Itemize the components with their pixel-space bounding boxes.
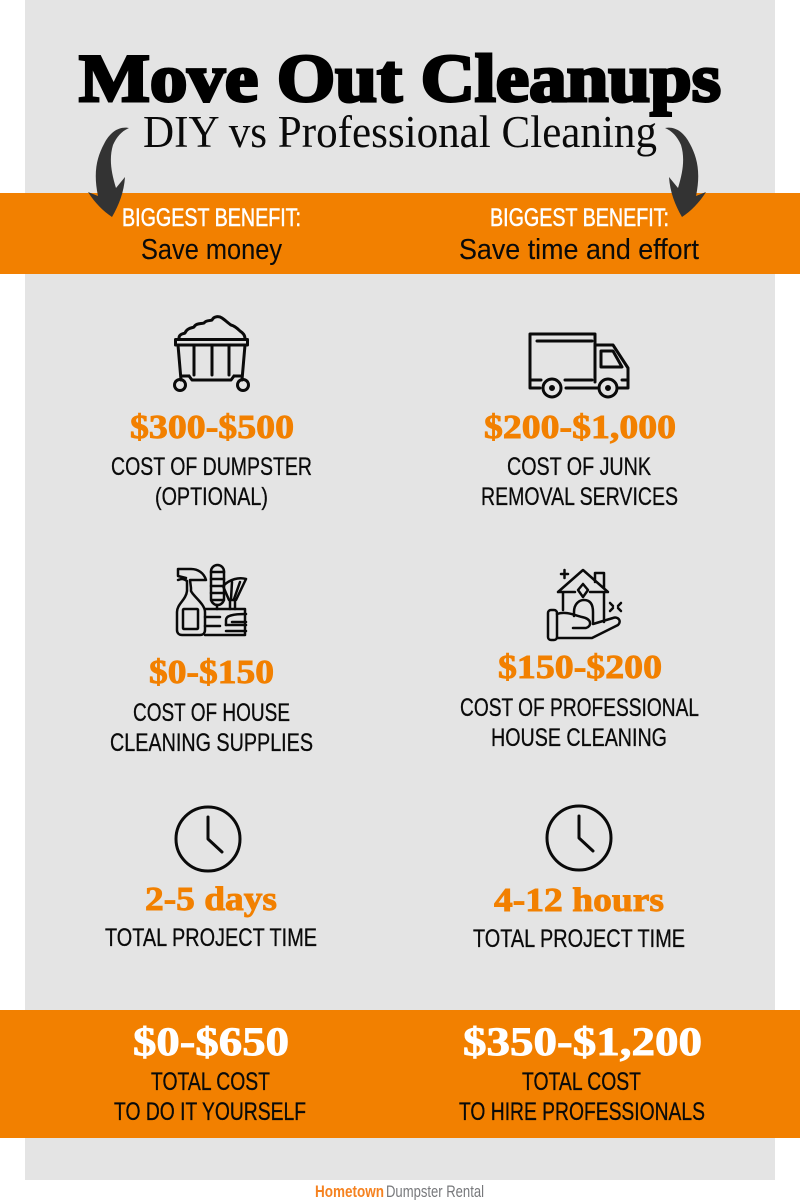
- right benefit: [459, 204, 699, 266]
- dumpster label line 2: (OPTIONAL): [155, 483, 268, 511]
- dumpster price: $300-$500: [130, 409, 294, 446]
- left total cost: [114, 1019, 306, 1126]
- DIY time label: TOTAL PROJECT TIME: [105, 924, 317, 952]
- left benefit text: Save money: [141, 234, 282, 266]
- arrow: left: [88, 128, 129, 217]
- professional cleaning label: COST OF PROFESSIONAL: [460, 694, 699, 722]
- right benefit text: Save time and effort: [459, 234, 699, 266]
- dumpster label: COST OF DUMPSTER: [111, 453, 312, 481]
- DIY total: $0-$650: [133, 1019, 289, 1064]
- junk removal price: $200-$1,000: [484, 409, 676, 446]
- junk removal label line 2: REMOVAL SERVICES: [481, 483, 678, 511]
- professional total label line 2: TO HIRE PROFESSIONALS: [459, 1098, 705, 1126]
- title: Move Out Cleanups: [79, 40, 721, 116]
- professional time value: 4-12 hours: [494, 882, 664, 919]
- junk removal label: COST OF JUNK: [507, 453, 651, 481]
- left project time: [105, 881, 317, 952]
- cleaning supplies label: COST OF HOUSE: [133, 699, 290, 727]
- DIY total label line 2: TO DO IT YOURSELF: [114, 1098, 306, 1126]
- right cost 1: [481, 409, 678, 511]
- professional cleaning label line 2: HOUSE CLEANING: [491, 724, 667, 752]
- left cost 2: [110, 654, 313, 757]
- icon: cleaning supplies: [177, 565, 246, 635]
- left benefit heading: BIGGEST BENEFIT:: [122, 204, 301, 232]
- cleaning supplies label line 2: CLEANING SUPPLIES: [110, 729, 313, 757]
- subtitle: DIY vs Professional Cleaning: [143, 107, 657, 157]
- right benefit heading: BIGGEST BENEFIT:: [490, 204, 669, 232]
- arrow: right: [665, 128, 706, 217]
- left benefit: [122, 204, 301, 266]
- footer logo: [315, 1182, 484, 1200]
- professional cleaning price: $150-$200: [498, 649, 662, 686]
- icon: clock left: [176, 807, 240, 871]
- orange band: biggest benefits: [0, 193, 800, 274]
- icon: clock right: [547, 806, 611, 870]
- professional time label: TOTAL PROJECT TIME: [473, 925, 685, 953]
- right total cost: [459, 1019, 705, 1126]
- left cost 1: [111, 409, 312, 511]
- icon: dumpster: [174, 317, 248, 390]
- cleaning supplies price: $0-$150: [149, 654, 274, 691]
- icon: house in hand: [548, 570, 621, 640]
- DIY time value: 2-5 days: [145, 881, 277, 918]
- professional total: $350-$1,200: [463, 1019, 702, 1064]
- DIY total label: TOTAL COST: [151, 1068, 270, 1096]
- right cost 2: [460, 649, 699, 752]
- professional total label: TOTAL COST: [522, 1068, 641, 1096]
- orange band: total cost: [0, 1010, 800, 1138]
- icon: truck: [530, 334, 628, 397]
- right project time: [473, 882, 685, 953]
